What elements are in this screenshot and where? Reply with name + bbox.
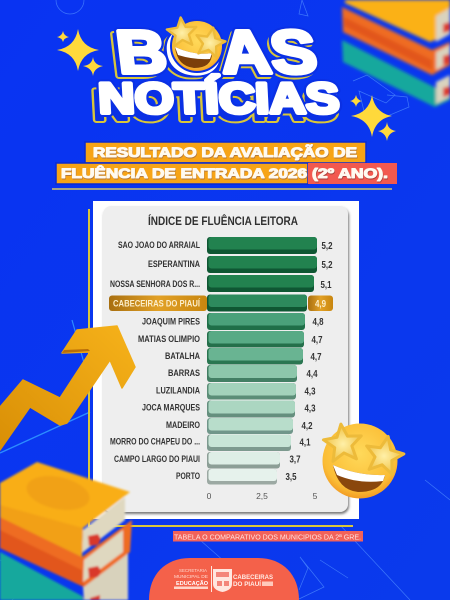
subtitle text shadow: (2º ANO). [312,166,388,182]
municipality labels [110,240,200,481]
title lettering: BOAS [112,18,321,86]
value labels: 4,2 [302,421,313,432]
title yellow offset outline: NOTÍCIAS [91,82,339,130]
logo: Cabeceiras do Piauí [233,575,273,588]
logo: crest [213,569,232,592]
logo: Secretaria Municipal de Educação [174,568,208,589]
highlight: Cabeceiras do Piauí value [308,296,333,311]
title yellow offset outline [91,21,339,130]
x axis: 5 [313,491,318,501]
municipality labels: MADEIRO [166,420,200,430]
icon: stacked books top right [342,0,450,107]
subtitle text: RESULTADO DA AVALIAÇÃO DE [93,143,357,160]
value labels: 4,3 [304,404,316,414]
x axis [207,491,318,501]
value labels: 3,7 [290,454,301,466]
icon: sparkles right [350,95,396,141]
value labels: 4,1 [300,438,311,448]
subtitle text shadow: FLUÊNCIA DE ENTRADA 2026 [62,165,308,182]
logo: Cabeceiras do Piauí: DO PIAUÍ [233,580,261,588]
title: Boas Notícias [91,18,341,130]
municipality labels: SAO JOAO DO ARRAIAL [118,240,200,250]
logo: Cabeceiras do Piauí: CABECEIRAS [233,575,273,581]
value labels: 5,2 [322,260,333,271]
icon: rising arrow [0,326,135,450]
subtitle text shadow: RESULTADO DA AVALIAÇÃO DE [94,144,358,161]
icon: stacked books bottom left [0,462,132,600]
x axis: 0 [207,491,212,501]
municipality labels: MORRO DO CHAPEU DO ... [110,436,200,446]
icon: star-eyes emoji in title [166,16,228,72]
logo: Secretaria Municipal de Educação: MUNICIPAL DE [174,574,208,579]
municipality labels: BATALHA [165,351,200,361]
subtitle text: (2º ANO). [312,165,388,181]
subtitle banner [52,142,397,189]
x axis: 2,5 [256,491,268,501]
panel: chart card [89,201,359,526]
value labels: 3,5 [286,472,297,483]
title yellow offset outline: NOTÍCIAS [91,82,339,130]
title yellow offset outline: BOAS [107,21,319,89]
municipality labels: CABECEIRAS DO PIAUÍ [113,298,200,308]
title lettering: NOTÍCIAS [97,75,341,123]
value labels: 4,4 [306,369,318,380]
icon: sparkles left [57,29,103,76]
caption: TABELA O COMPARATIVO DOS MUNICIPIOS DA 2ª GRE. [174,532,361,542]
bar chart: reading fluency by municipality [109,237,333,501]
municipality labels: BARRAS [168,368,200,378]
footer: institutional logos [149,558,299,600]
value labels: 4,9 [315,299,326,310]
title yellow offset outline: BOAS [107,21,319,89]
chart title: ÍNDICE DE FLUÊNCIA LEITORA [148,213,298,228]
icon: star-eyes emoji beside chart [322,422,407,498]
title blue outline: NOTÍCIAS [97,75,341,123]
value labels [286,241,333,483]
title blue outline: BOAS [112,18,321,86]
municipality labels: JOAQUIM PIRES [142,316,200,326]
title blue outline [97,18,341,123]
value labels: 4,7 [310,352,322,363]
value labels: 4,7 [312,335,323,346]
subtitle text: FLUÊNCIA DE ENTRADA 2026 [61,164,307,181]
value labels: 5,1 [320,280,332,291]
municipality labels: NOSSA SENHORA DOS R... [110,279,200,289]
logo: Secretaria Municipal de Educação: EDUCAÇÃO [176,580,208,587]
subtitle text [61,143,388,181]
municipality labels: CAMPO LARGO DO PIAUI [114,454,200,464]
municipality labels: MATIAS OLIMPIO [138,334,200,344]
value labels: 4,8 [312,317,324,328]
municipality labels: LUZILANDIA [156,386,200,396]
municipality labels: PORTO [176,471,200,481]
value labels: 5,2 [322,241,333,252]
subtitle text shadow [62,144,388,182]
municipality labels: JOCA MARQUES [142,402,200,412]
value labels: 4,3 [304,386,316,398]
title lettering [97,18,341,123]
highlight: Cabeceiras do Piauí label [109,296,207,311]
logo: Secretaria Municipal de Educação: SECRETARIA [179,568,207,573]
municipality labels: ESPERANTINA [148,259,200,269]
